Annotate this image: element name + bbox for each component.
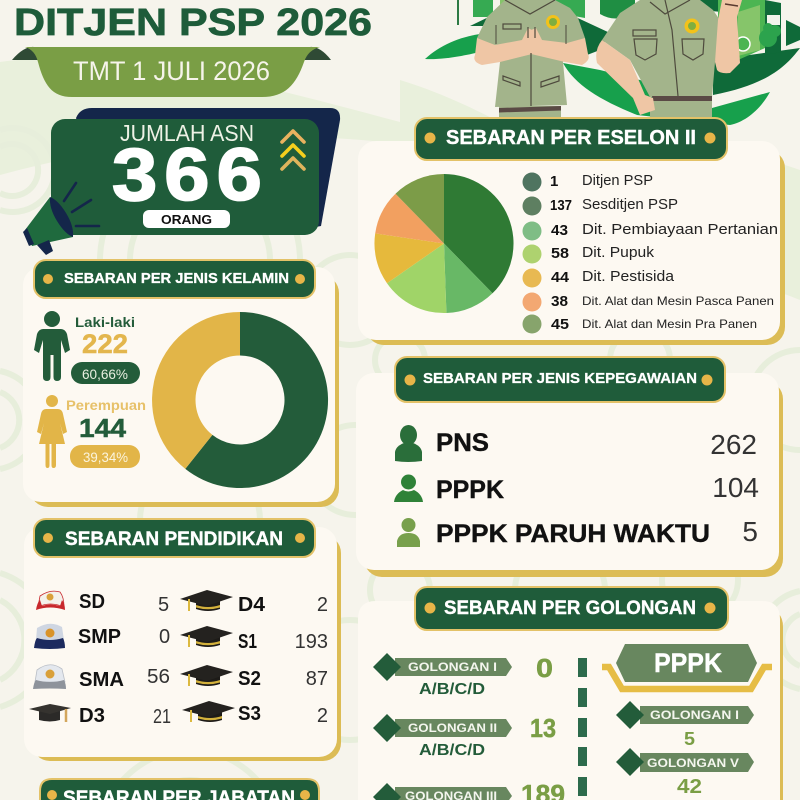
icon: male xyxy=(34,311,70,381)
legend: Dit. Pembiayaan Pertanian xyxy=(582,221,778,238)
panel: jenis kelamin xyxy=(23,267,339,507)
legend: 43 xyxy=(551,222,568,239)
value: PPPK: 104 xyxy=(712,472,759,503)
tag: PPPK golongan I: 5 xyxy=(684,729,695,749)
icon: hat SMA xyxy=(33,665,66,689)
heading: jenis kepegawaian: SEBARAN PER JENIS KEPEGAWAIAN xyxy=(423,370,697,387)
badge: PPPK: PPPK xyxy=(654,648,722,678)
tag: golongan II: 13 xyxy=(530,713,556,743)
donut chart xyxy=(152,312,328,488)
icon: hat SD xyxy=(36,591,65,610)
illustration: two officers xyxy=(425,0,800,125)
education values: 2 xyxy=(317,594,328,616)
left officer xyxy=(474,0,589,120)
education labels: S2 xyxy=(238,668,261,690)
tag: golongan II xyxy=(373,713,556,759)
education labels: SMA xyxy=(79,669,124,691)
heading: jenis kepegawaian xyxy=(395,357,725,402)
tag: PPPK golongan V: GOLONGAN V xyxy=(647,756,739,770)
icon: female xyxy=(37,395,67,468)
tag: golongan II: GOLONGAN II xyxy=(408,721,497,735)
education labels: S3 xyxy=(238,703,261,725)
tag: PPPK golongan I xyxy=(616,701,754,749)
total ASN card: 366 xyxy=(112,134,269,216)
education values: 56 xyxy=(147,666,170,688)
female stats: 39,34% xyxy=(83,450,128,465)
heading: pendidikan xyxy=(34,519,315,557)
heading: jenis kelamin xyxy=(34,260,315,298)
education values xyxy=(147,594,328,728)
ribbon: TMT date: TMT 1 JULI 2026 xyxy=(73,56,270,86)
icon: graduation cap D3 xyxy=(29,704,71,722)
icon: hat SMP xyxy=(34,624,65,649)
legend: 137 xyxy=(550,197,572,214)
tag: golongan I: 0 xyxy=(536,653,553,683)
legend: Dit. Alat dan Mesin Pra Panen xyxy=(582,317,757,331)
heading: golongan: SEBARAN PER GOLONGAN xyxy=(444,597,696,619)
title: DITJEN PSP 2026 xyxy=(14,2,372,44)
heading: pendidikan: SEBARAN PENDIDIKAN xyxy=(65,529,283,550)
total ASN card xyxy=(51,108,340,235)
panel: golongan xyxy=(358,601,783,800)
heading: eselon II xyxy=(415,118,727,160)
label: PPPK: PPPK xyxy=(436,476,504,504)
label: PNS: PNS xyxy=(436,429,489,457)
legend: 45 xyxy=(551,316,569,333)
male stats: Laki-laki xyxy=(75,315,135,330)
legend: 44 xyxy=(551,269,570,286)
legend: Dit. Alat dan Mesin Pasca Panen xyxy=(582,294,774,308)
panel: eselon II xyxy=(358,141,785,345)
female stats xyxy=(66,398,146,468)
education values: 0 xyxy=(159,626,170,648)
icon: PPPK paruh waktu xyxy=(397,518,420,547)
education labels: SD xyxy=(79,591,105,613)
legend: 1 xyxy=(550,173,558,190)
total ASN card: ORANG xyxy=(161,213,212,227)
total ASN card: JUMLAH ASN xyxy=(120,120,254,146)
heading: jenis kelamin: SEBARAN PER JENIS KELAMIN xyxy=(64,270,289,287)
tag: golongan I: GOLONGAN I xyxy=(408,660,497,674)
male stats: 222 xyxy=(82,329,128,359)
legend: Dit. Pestisida xyxy=(582,268,675,285)
badge: PPPK xyxy=(602,644,772,689)
pie chart xyxy=(374,174,514,313)
heading: jabatan xyxy=(40,779,319,800)
education labels: S1 xyxy=(238,631,257,653)
heading: eselon II: SEBARAN PER ESELON II xyxy=(446,127,696,149)
education values: 21 xyxy=(153,706,171,728)
heading: golongan xyxy=(415,587,728,630)
tag: golongan I xyxy=(373,653,553,698)
label: PPPK paruh waktu: PPPK PARUH WAKTU xyxy=(436,520,710,548)
icons: graduation caps xyxy=(180,590,235,722)
icon: PNS xyxy=(395,425,422,462)
male stats: 60,66% xyxy=(82,367,128,382)
legend: Dit. Pupuk xyxy=(582,244,655,261)
tag: PPPK golongan V xyxy=(616,748,754,798)
panel: jenis kepegawaian xyxy=(356,373,783,577)
divider xyxy=(578,658,587,796)
education values: 87 xyxy=(306,668,328,690)
legend: Sesditjen PSP xyxy=(582,196,678,213)
education values: 193 xyxy=(295,631,328,653)
education labels xyxy=(78,591,266,727)
education labels: D4 xyxy=(238,594,266,616)
ribbon: TMT date xyxy=(12,47,331,97)
icon: chevrons xyxy=(282,131,304,169)
education values: 5 xyxy=(158,594,169,616)
legend: 38 xyxy=(551,293,568,310)
tag: golongan II: A/B/C/D xyxy=(419,742,485,759)
value: PNS: 262 xyxy=(710,429,757,460)
legend: Ditjen PSP xyxy=(582,172,653,189)
tag: PPPK golongan I: GOLONGAN I xyxy=(650,708,739,722)
tag: PPPK golongan V: 42 xyxy=(677,776,702,798)
female stats: Perempuan xyxy=(66,398,146,413)
education values: 2 xyxy=(317,705,328,727)
legend xyxy=(522,172,778,334)
legend: 58 xyxy=(551,245,569,262)
right officer xyxy=(596,0,742,120)
icon: PPPK xyxy=(394,474,423,502)
icon: megaphone xyxy=(23,183,99,255)
male stats xyxy=(71,315,140,384)
tag: golongan I: A/B/C/D xyxy=(419,681,485,698)
education labels: D3 xyxy=(79,705,105,727)
panel: pendidikan xyxy=(24,527,341,761)
education labels: SMP xyxy=(78,626,121,648)
female stats: 144 xyxy=(79,413,127,443)
value: PPPK paruh waktu: 5 xyxy=(742,516,758,547)
tag: golongan III xyxy=(373,779,565,800)
